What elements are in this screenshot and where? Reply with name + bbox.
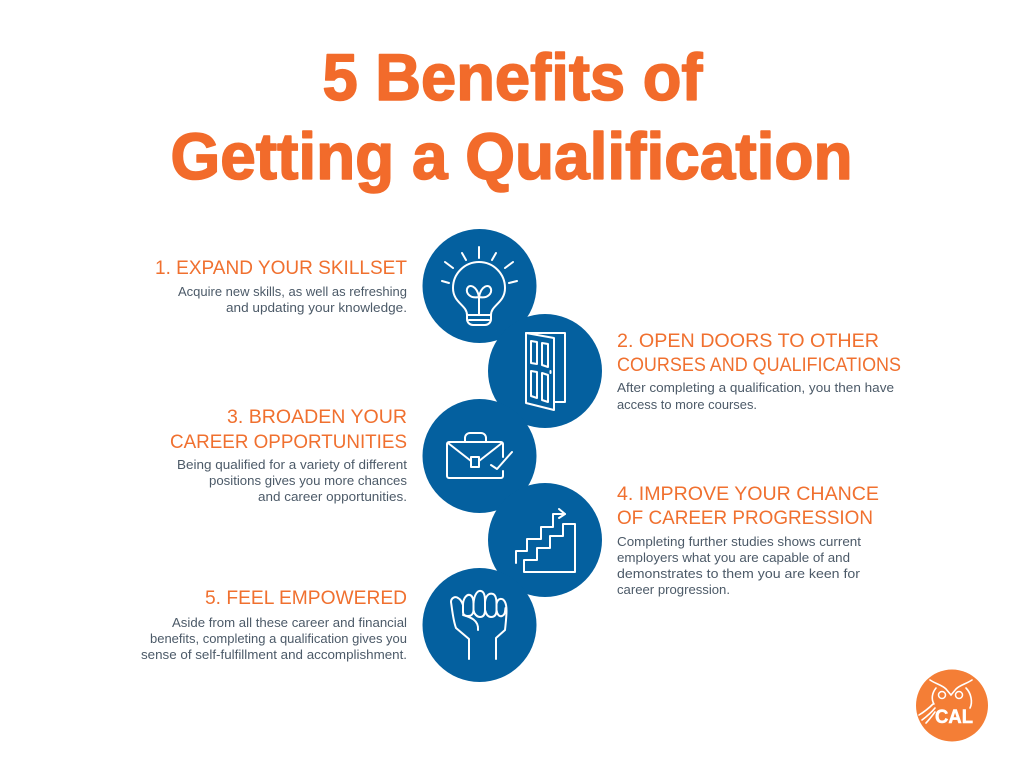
title bbox=[170, 40, 852, 193]
title: Getting a Qualification bbox=[170, 119, 852, 193]
text block: 3 broaden your career opportunities: positions gives you more chances bbox=[209, 474, 407, 488]
text block: 3 broaden your career opportunities: 3. BROADEN YOUR bbox=[227, 406, 407, 428]
text block: 3 broaden your career opportunities: CAREER OPPORTUNITIES bbox=[170, 431, 407, 453]
icon: briefcase with check bbox=[447, 433, 512, 478]
icon: raised fist bbox=[451, 591, 506, 659]
icon: open door bbox=[526, 333, 565, 410]
logo: CAL owl: CAL bbox=[935, 707, 973, 728]
circle chain bbox=[422, 229, 602, 682]
text block: 1 expand your skillset: and updating your knowledge. bbox=[226, 301, 407, 315]
text block: 4 improve your chance: demonstrates to them you are keen for bbox=[617, 567, 860, 581]
text block: 1 expand your skillset: Acquire new skills, as well as refreshing bbox=[178, 285, 407, 299]
text block: 4 improve your chance: 4. IMPROVE YOUR CHANCE bbox=[617, 483, 879, 505]
icon: stairs with arrow bbox=[516, 509, 575, 572]
text block: 3 broaden your career opportunities: and career opportunities. bbox=[258, 490, 407, 504]
text block: 2 open doors: access to more courses. bbox=[617, 398, 757, 412]
text block: 3 broaden your career opportunities: Being qualified for a variety of different bbox=[177, 458, 408, 472]
text block: 4 improve your chance: career progression. bbox=[617, 583, 730, 597]
title: 5 Benefits of bbox=[322, 40, 703, 114]
text block: 4 improve your chance: Completing further studies shows current bbox=[617, 535, 862, 549]
text block: 5 feel empowered: sense of self-fulfillment and accomplishment. bbox=[141, 648, 407, 662]
text block: 1 expand your skillset bbox=[155, 257, 407, 315]
icon: light bulb bbox=[442, 247, 517, 325]
logo: CAL owl bbox=[916, 670, 988, 742]
text block: 5 feel empowered: Aside from all these career and financial bbox=[172, 616, 407, 630]
text block: 5 feel empowered: benefits, completing a qualification gives you bbox=[150, 632, 407, 646]
text block: 4 improve your chance: employers what you are capable of and bbox=[617, 551, 850, 565]
text block: 2 open doors: 2. OPEN DOORS TO OTHER bbox=[617, 330, 879, 352]
text block: 5 feel empowered bbox=[141, 587, 407, 662]
text block: 5 feel empowered: 5. FEEL EMPOWERED bbox=[205, 587, 407, 609]
text block: 2 open doors: COURSES AND QUALIFICATIONS bbox=[617, 354, 901, 376]
text block: 4 improve your chance: OF CAREER PROGRESSION bbox=[617, 507, 873, 529]
text block: 1 expand your skillset: 1. EXPAND YOUR SKILLSET bbox=[155, 257, 407, 279]
text block: 4 improve your chance bbox=[617, 483, 879, 597]
text block: 2 open doors bbox=[617, 330, 901, 412]
text block: 2 open doors: After completing a qualification, you then have bbox=[617, 381, 894, 395]
text block: 3 broaden your career opportunities bbox=[170, 406, 408, 504]
